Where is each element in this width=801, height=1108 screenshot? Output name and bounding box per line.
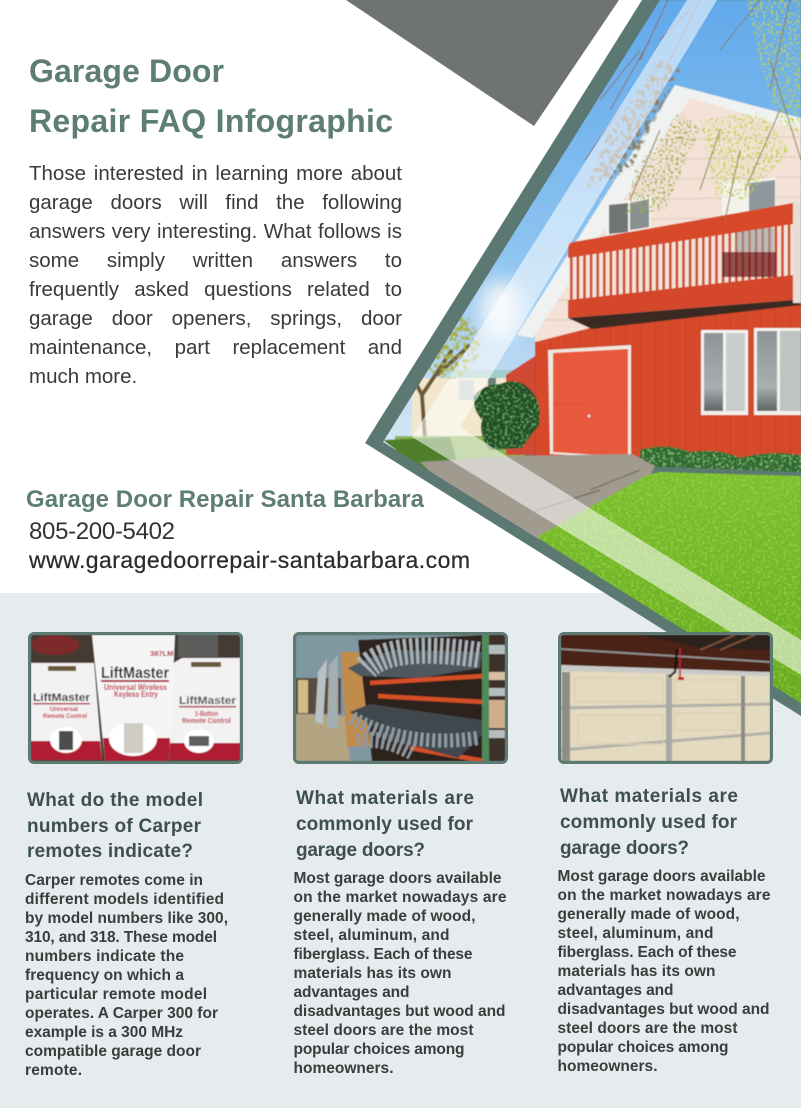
- foliage right: [700, 0, 801, 200]
- column 3 answer: disadvantages but wood and: [558, 1001, 770, 1018]
- column 1 question: remotes indicate?: [27, 841, 193, 862]
- intro paragraph: frequently asked questions related to: [29, 278, 402, 301]
- left box: LiftMaster: [33, 692, 91, 704]
- column 2 answer: materials has its own: [294, 965, 452, 982]
- centre box: LiftMaster: [101, 665, 169, 682]
- door panels leaning: [315, 659, 327, 724]
- phone: 805-200-5402: [29, 518, 175, 545]
- column 3 question: garage doors?: [560, 838, 689, 859]
- column 3 answer: fiberglass. Each of these: [558, 944, 737, 961]
- column 3 answer: homeowners.: [558, 1058, 658, 1075]
- hanging tree branches: [585, 0, 801, 220]
- column 1 answer: different models identified: [25, 891, 224, 908]
- centre box: 387LM: [150, 649, 173, 658]
- centre box: Universal Wireless: [104, 682, 167, 692]
- roof trim: [517, 85, 801, 338]
- centre box: [92, 635, 175, 761]
- column 1 question: [27, 790, 203, 862]
- osb board: [341, 652, 372, 747]
- balcony underside: [568, 300, 801, 329]
- column 2 answer: [294, 870, 507, 1077]
- teal chevron frame: [365, 0, 801, 716]
- intro paragraph: maintenance, part replacement and: [29, 336, 402, 359]
- column 2 answer: Most garage doors available: [294, 870, 502, 887]
- title: Garage Door: [29, 53, 224, 89]
- sky: [380, 0, 801, 450]
- photo card 2: warehouse track racks: [293, 632, 508, 764]
- intro paragraph: some simply written answers to: [29, 249, 402, 272]
- intro paragraph: Those interested in learning more about: [29, 162, 402, 185]
- balcony top beam: [568, 203, 793, 258]
- column 2 question: What materials are: [296, 788, 474, 809]
- column 1 answer: numbers indicate the: [25, 948, 184, 965]
- column 3 answer: on the market nowadays are: [558, 887, 771, 904]
- red lower wall: [535, 302, 801, 458]
- column 1 answer: frequency on which a: [25, 967, 184, 984]
- steel stiles: [666, 674, 672, 761]
- column 1 answer: 310, and 318. These model: [25, 929, 217, 946]
- right box: LiftMaster: [179, 695, 237, 707]
- column 2 question: [296, 788, 474, 861]
- rack background: [358, 635, 485, 761]
- column 2 answer: popular choices among: [294, 1041, 464, 1058]
- hedge: [640, 446, 801, 472]
- column 1 answer: remote.: [25, 1062, 82, 1079]
- lower windows: [701, 328, 801, 415]
- panel seams: [561, 704, 770, 750]
- column 1 answer: particular remote model: [25, 986, 207, 1003]
- column 1 answer: [25, 872, 228, 1079]
- title: Repair FAQ Infographic: [29, 103, 393, 139]
- column 2 answer: advantages and: [294, 984, 410, 1001]
- column 3 answer: popular choices among: [558, 1039, 728, 1056]
- upper windows: [606, 177, 776, 235]
- column 1 answer: by model numbers like 300,: [25, 910, 228, 927]
- hero photo: house with red garage: [380, 0, 801, 710]
- intro paragraph: answers very interesting. What follows is: [29, 220, 402, 243]
- photo card 1: remote boxes: [28, 632, 243, 764]
- lawn: [537, 472, 801, 710]
- column 2 answer: generally made of wood,: [294, 908, 476, 925]
- column 3 question: What materials are: [560, 786, 738, 807]
- red side wing: [506, 356, 535, 455]
- column 3 answer: Most garage doors available: [558, 868, 766, 885]
- column 3 answer: materials has its own: [558, 963, 716, 980]
- cords: [679, 648, 681, 678]
- siding lines: [540, 137, 801, 320]
- ceiling wood: [561, 635, 770, 674]
- left box: Universal: [50, 706, 78, 713]
- column 3 answer: steel, aluminum, and: [558, 925, 714, 942]
- translucent white chevron band: [412, 0, 801, 675]
- centre box: Keyless Entry: [114, 690, 158, 699]
- dark grey triangle: [346, 0, 619, 126]
- column 3 question: commonly used for: [560, 812, 738, 833]
- right box: Remote Control: [182, 718, 231, 725]
- bush: [474, 381, 540, 450]
- intro paragraph: garage door openers, springs, door: [29, 307, 402, 330]
- driveway: [420, 454, 655, 540]
- contact block: [26, 486, 470, 573]
- column 2 answer: homeowners.: [294, 1060, 394, 1077]
- rail: [561, 649, 770, 662]
- intro paragraph: [29, 162, 402, 388]
- pallets: [489, 635, 505, 761]
- column 1 question: What do the model: [27, 790, 203, 811]
- column 1 answer: compatible garage door: [25, 1043, 201, 1060]
- foliage upper left: [585, 60, 680, 190]
- top frame: [561, 665, 770, 676]
- column 2 answer: steel, aluminum, and: [294, 927, 450, 944]
- column 3 answer: steel doors are the most: [558, 1020, 738, 1037]
- cream siding: [535, 92, 801, 345]
- lower panel background: [0, 593, 801, 1108]
- foliage centre: [625, 110, 700, 215]
- column 2 question: commonly used for: [296, 814, 474, 835]
- floor: [296, 714, 350, 761]
- column 1 answer: operates. A Carper 300 for: [25, 1005, 218, 1022]
- column 2 question: garage doors?: [296, 840, 425, 861]
- company name: Garage Door Repair Santa Barbara: [26, 486, 425, 513]
- balcony: [565, 203, 801, 329]
- left box: [31, 663, 102, 760]
- intro paragraph: much more.: [29, 365, 137, 388]
- column 2 answer: disadvantages but wood and: [294, 1003, 506, 1020]
- distant trees and neighbour house: [383, 280, 525, 476]
- balcony railing: [569, 224, 793, 301]
- column 3 question: [560, 786, 738, 859]
- column 3 answer: generally made of wood,: [558, 906, 740, 923]
- garage door: [548, 345, 631, 459]
- column 1 answer: example is a 300 MHz: [25, 1024, 183, 1041]
- title: [29, 53, 393, 139]
- galvanised tracks: [348, 650, 482, 678]
- column 1 answer: Carper remotes come in: [25, 872, 203, 889]
- shelf beams: [370, 676, 484, 761]
- balcony lower beam: [568, 275, 793, 318]
- column 2 answer: fiberglass. Each of these: [294, 946, 473, 963]
- column 3 answer: [558, 868, 771, 1075]
- column 1 question: numbers of Carper: [27, 816, 202, 837]
- column 3 answer: advantages and: [558, 982, 674, 999]
- left box: Remote Control: [43, 713, 87, 720]
- green post: [482, 635, 489, 761]
- intro paragraph: garage doors will find the following: [29, 191, 402, 214]
- column 2 answer: on the market nowadays are: [294, 889, 507, 906]
- right box: 1-Button: [195, 711, 218, 718]
- website: www.garagedoorrepair-santabarbara.com: [28, 547, 470, 573]
- photo card 3: garage door interior: [558, 632, 773, 764]
- column 2 answer: steel doors are the most: [294, 1022, 474, 1039]
- right box: [170, 658, 240, 760]
- bare branches: [585, 0, 700, 200]
